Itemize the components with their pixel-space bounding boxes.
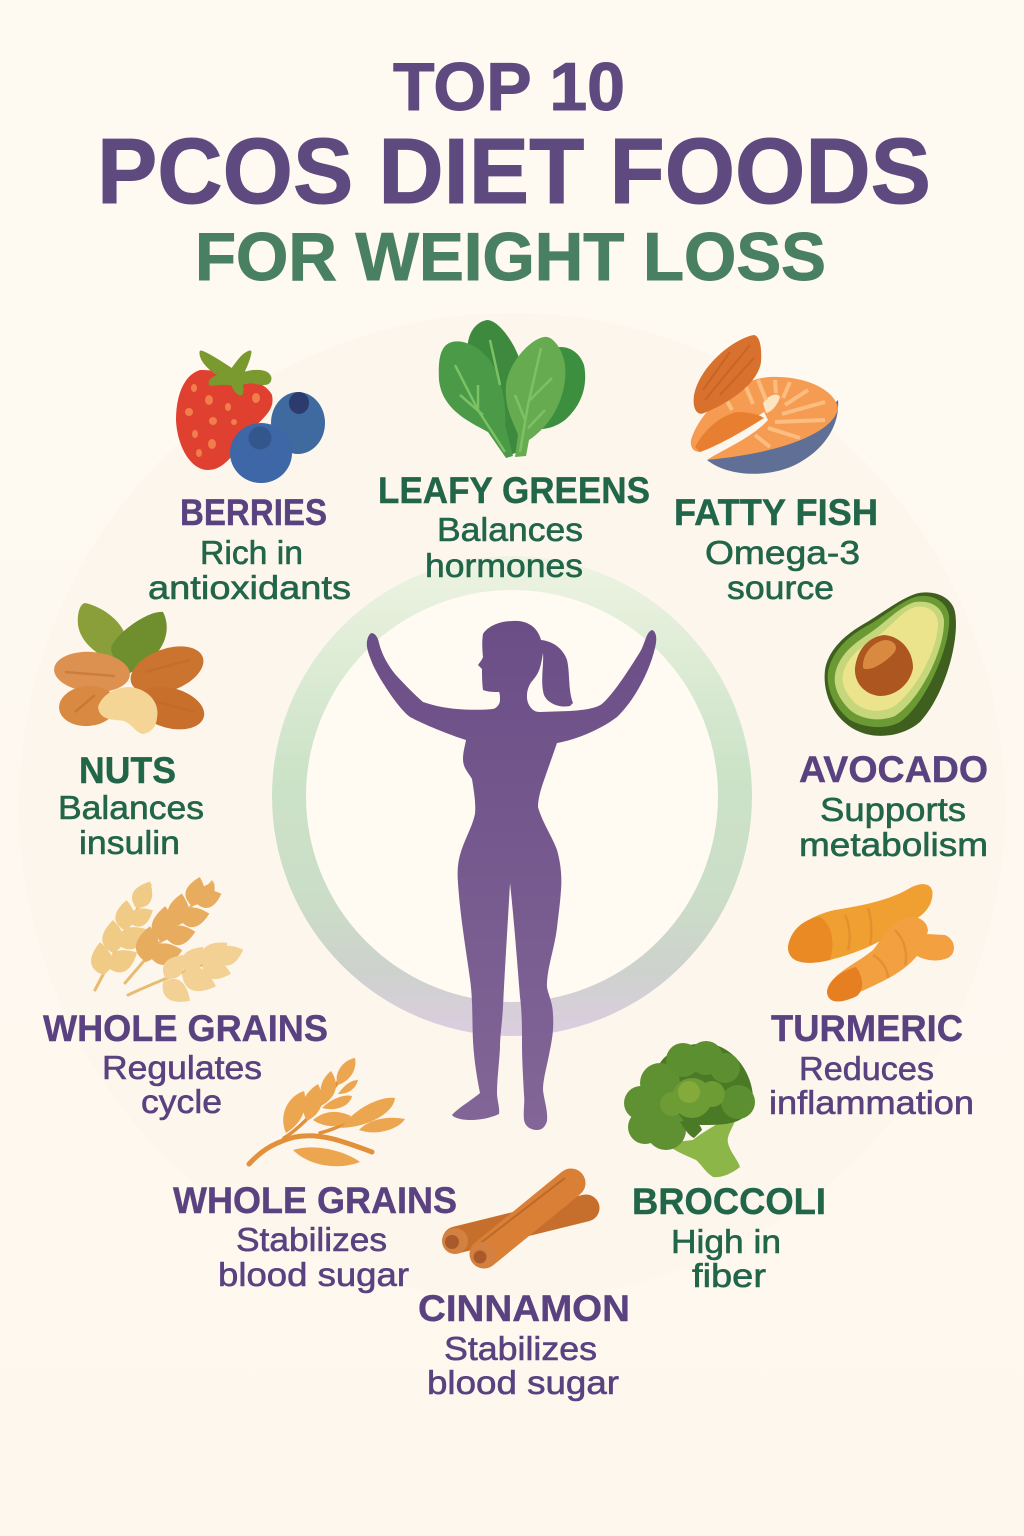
description: leafy greens [425, 511, 583, 584]
description: broccoli: High in [671, 1223, 781, 1260]
description: whole grains: Stabilizes [236, 1221, 387, 1258]
icon: salmon steak and almond [691, 335, 838, 474]
food: cinnamon [418, 1178, 630, 1401]
label: whole grains: WHOLE GRAINS [173, 1180, 457, 1221]
title line: PCOS diet foods: PCOS DIET FOODS [97, 119, 931, 223]
icon: broccoli [624, 1041, 755, 1177]
description: nuts [58, 789, 204, 861]
food: broccoli [624, 1041, 826, 1294]
description: broccoli: fiber [692, 1257, 766, 1294]
description: turmeric: Reduces [799, 1050, 934, 1087]
icon: orange wheat sprig [249, 1058, 405, 1166]
description: avocado: metabolism [799, 826, 988, 863]
description: berries [148, 534, 351, 606]
description: nuts: Balances [58, 789, 204, 826]
description: leafy greens: Balances [437, 511, 583, 548]
title line: top 10: TOP 10 [393, 49, 625, 125]
label: whole grains: WHOLE GRAINS [43, 1008, 328, 1049]
label: berries: BERRIES [180, 492, 327, 533]
food: whole grains (left) [43, 874, 328, 1120]
description: whole grains: cycle [141, 1083, 222, 1120]
description: whole grains: Regulates [102, 1049, 262, 1086]
label: nuts: NUTS [79, 750, 176, 791]
label: broccoli: BROCCOLI [632, 1181, 826, 1222]
description: cinnamon [427, 1330, 619, 1401]
description: whole grains: blood sugar [218, 1256, 409, 1293]
description: cinnamon: Stabilizes [444, 1330, 597, 1367]
icon: almonds and cashew [52, 603, 210, 736]
description: whole grains [218, 1221, 409, 1293]
label: turmeric: TURMERIC [771, 1008, 963, 1049]
food: avocado [799, 592, 988, 863]
food: turmeric [769, 884, 974, 1121]
label: leafy greens: LEAFY GREENS [378, 470, 650, 511]
food: leafy greens [378, 320, 650, 584]
icon: turmeric roots [788, 884, 954, 1002]
description: leafy greens: hormones [425, 547, 583, 584]
woman silhouette [367, 621, 656, 1130]
description: cinnamon: blood sugar [427, 1364, 619, 1401]
label: avocado: AVOCADO [799, 749, 988, 790]
food: berries [148, 352, 351, 606]
title [97, 49, 931, 295]
description: avocado [799, 791, 988, 863]
food: nuts [52, 603, 210, 861]
icon: spinach leaves [439, 320, 585, 458]
food: fatty fish [674, 335, 878, 606]
central ring [289, 573, 735, 1019]
description: turmeric [769, 1050, 974, 1121]
description: fatty fish [705, 534, 860, 606]
icon: cinnamon sticks [442, 1178, 586, 1268]
description: nuts: insulin [79, 824, 180, 861]
description: fatty fish: Omega-3 [705, 534, 860, 571]
icon: strawberry and blueberries [176, 352, 325, 483]
icon: avocado half [825, 592, 956, 736]
food: whole grains (bottom) [173, 1058, 457, 1293]
description: berries: Rich in [200, 534, 303, 571]
description: avocado: Supports [820, 791, 966, 828]
title line: for weight loss: FOR WEIGHT LOSS [195, 219, 826, 295]
description: broccoli [671, 1223, 781, 1294]
description: turmeric: inflammation [769, 1084, 974, 1121]
label: fatty fish: FATTY FISH [674, 492, 878, 533]
label: cinnamon: CINNAMON [418, 1288, 630, 1329]
description: whole grains [102, 1049, 262, 1120]
description: berries: antioxidants [148, 569, 351, 606]
icon: pale wheat sprigs [89, 874, 247, 1010]
description: fatty fish: source [727, 569, 834, 606]
